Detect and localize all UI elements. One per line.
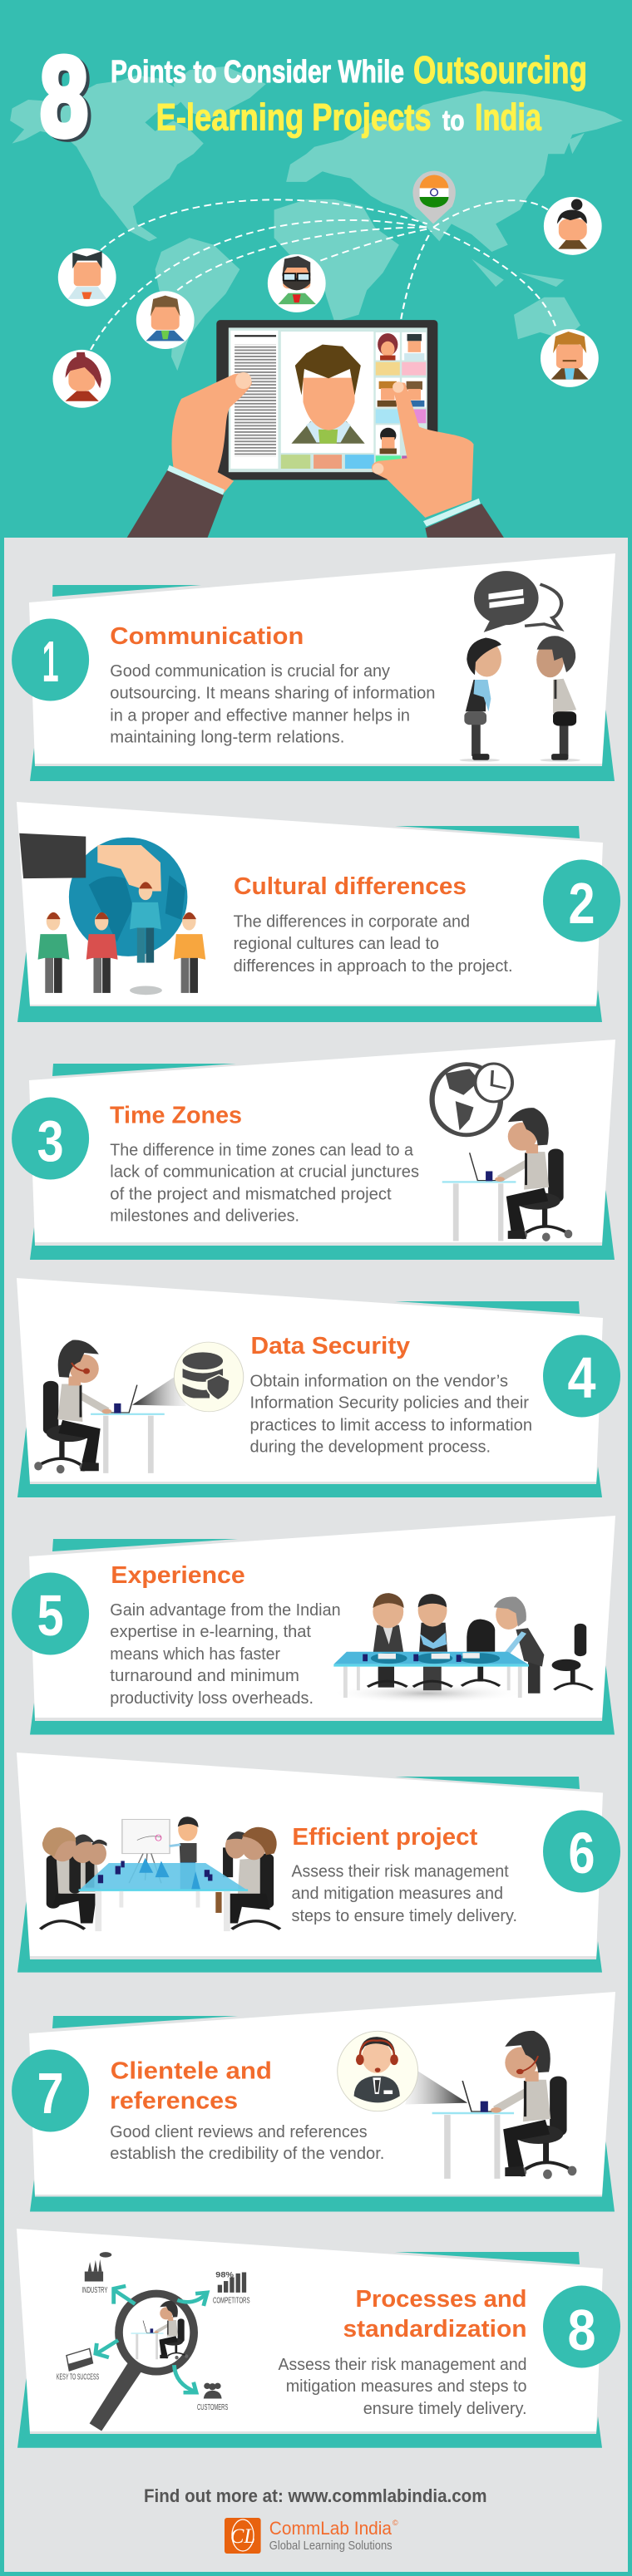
body text [234,912,513,976]
icon: small person at desk [131,2301,188,2359]
avatar: woman with top knot [544,197,602,255]
presenter [170,1816,198,1889]
body text: expertise in e-learning, that [110,1622,311,1641]
tablet thumbnails [281,332,426,469]
body text: establish the credibility of the vendor. [110,2144,384,2163]
heading: standardization [343,2316,527,2342]
person red [86,912,118,993]
footer link: Find out more at: www.commlabindia.com [144,2485,487,2506]
number badge 2 [543,859,620,942]
panel: 4 data security [17,1278,620,1497]
tablet main profile [291,345,365,444]
body text [291,1862,517,1925]
heading [110,2058,272,2114]
number badge 1 [12,618,89,701]
whiteboard [122,1819,170,1883]
seated person one [368,1593,407,1688]
icon: key to success card: KESY TO SUCCESS [57,2372,99,2382]
panel: 6 efficient project [17,1753,620,1973]
panel: 3 time zones [12,1040,615,1260]
heading: Cultural differences [234,873,467,900]
heading: Efficient project [292,1824,478,1851]
body text [278,2355,527,2418]
avatars [52,197,602,408]
icon: person at desk [432,2031,576,2179]
avatar: bearded man with glasses [268,254,326,312]
icon: database and shield bubble [132,1342,244,1412]
heading: Communication [110,623,304,650]
heading: references [110,2087,238,2114]
body text: maintaining long-term relations. [110,727,344,746]
body text: means which has faster [110,1644,280,1664]
body text [110,1141,419,1225]
title line 2: to [442,106,464,137]
icon: headset on person [516,2056,538,2074]
body text [110,1600,341,1708]
body text: Information Security policies and their [249,1393,529,1412]
body text: of the project and mismatched project [110,1185,392,1203]
icon: competitors bar chart [213,2270,249,2306]
number badge 7: 7 [37,2061,64,2126]
icon: industry: INDUSTRY [81,2285,107,2295]
logo wordmark [269,2518,398,2553]
body text: Obtain information on the vendor’s [249,1371,508,1390]
number badge 4 [543,1335,620,1418]
body text: Assess their risk management and [278,2355,527,2374]
big number 8: 8 [43,36,91,162]
person green [38,912,69,993]
body text: practices to limit access to information [249,1415,532,1434]
icon: competitors bar chart: 98% [215,2270,234,2279]
number badge 5 [12,1572,89,1655]
heading: Clientele and [111,2058,272,2085]
body text: lack of communication at crucial junctures [110,1162,419,1182]
logo mark: CL [230,2525,255,2548]
icon: competitors bar chart: COMPETITORS [213,2296,249,2306]
glasses on table [98,1861,212,1883]
seated person two [413,1594,452,1690]
tablet [216,320,437,479]
body text: Good communication is crucial for any [110,661,391,681]
number badge 7 [12,2049,89,2132]
heading: Data Security [251,1333,410,1359]
body text: in a proper and effective manner helps in [110,705,410,725]
arrows around the magnifier [96,2286,207,2392]
number badge 1: 1 [42,629,59,694]
logo wordmark: © [393,2519,398,2527]
body text: regional cultures can lead to [234,934,439,953]
icon: magnifying glass [90,2293,194,2431]
body text: Gain advantage from the Indian [110,1600,341,1620]
right attendees [215,1827,280,1930]
title line 2: E-learning Projects [156,96,432,139]
number badge 5: 5 [37,1583,64,1648]
panel: 5 experience [12,1516,615,1735]
icon: two people talking [460,571,580,762]
title [40,33,587,162]
india location pin [412,171,456,224]
left attendees [40,1827,106,1930]
avatar: man with orange tie [58,248,116,307]
body text [110,2122,384,2163]
number badge 8: 8 [567,2298,595,2362]
icon: key to success card [57,2348,99,2382]
person blue lifted [130,882,161,963]
world map [10,66,623,371]
body text: productivity loss overheads. [110,1689,314,1708]
number badge 4: 4 [567,1345,596,1410]
panel: 7 clientele and references [12,1992,615,2212]
body text: differences in approach to the project. [234,956,513,976]
icon: customers [197,2383,228,2412]
panel: 8 processes and standardization [17,2229,620,2448]
avatar: man with green tie [136,291,195,349]
number badge 3 [12,1097,89,1180]
title line 1: Points to Consider While [111,55,404,90]
body text: outsourcing. It means sharing of information [110,683,436,703]
icon: customers: CUSTOMERS [197,2402,228,2412]
spare chair [552,1624,593,1689]
body text: Assess their risk management [291,1862,509,1881]
big number 8: 8 [40,33,88,160]
icon: person at desk with headset [34,1340,165,1473]
icon: person at desk [442,1108,572,1241]
avatar: woman with red hair [52,350,111,408]
body text: steps to ensure timely delivery. [291,1906,517,1925]
dashed connection routes [91,199,556,350]
heading [343,2286,527,2342]
title line 1 [111,48,587,91]
title line 2: India [475,96,542,139]
body text [110,661,436,746]
header illustration [10,66,623,538]
icon: meeting around a table [330,1593,593,1703]
icon: industry [81,2252,111,2295]
body text: milestones and deliveries. [110,1206,299,1225]
body text [249,1371,532,1457]
icon: support agent bubble [338,2031,467,2111]
logo wordmark: Global Learning Solutions [269,2539,393,2553]
panel: 1 communication [12,553,615,781]
number badge 6: 6 [569,1821,595,1885]
panel: 2 cultural differences [17,802,620,1022]
body text: The differences in corporate and [234,912,470,932]
body text: Good client reviews and references [110,2122,368,2141]
empty chair [462,1620,500,1686]
number badge 2: 2 [569,871,595,936]
heading: Processes and [356,2286,527,2313]
logo mark [225,2518,261,2554]
hands holding the tablet [127,372,504,538]
avatar: man with moustache [541,329,599,387]
body text: mitigation measures and steps to [286,2377,527,2396]
icon: globe and clock [432,1064,512,1135]
heading: Experience [111,1562,245,1589]
body text: ensure timely delivery. [363,2399,527,2418]
number badge 6 [543,1810,620,1893]
icon: presentation in a meeting room [40,1816,280,1931]
icon: hand choosing a person in front of a globe [19,833,205,995]
number badge 8 [543,2285,620,2368]
number badge 3: 3 [37,1109,64,1173]
body text: during the development process. [249,1438,491,1457]
body text: The difference in time zones can lead to a [110,1141,414,1160]
gray content background [4,538,628,2572]
logo [225,2518,398,2554]
heading: Time Zones [110,1103,242,1129]
logo wordmark: CommLab India [269,2518,393,2539]
body text: turnaround and minimum [110,1666,299,1685]
standing person [494,1597,544,1694]
body text: and mitigation measures and [291,1884,503,1903]
person orange [174,912,205,993]
